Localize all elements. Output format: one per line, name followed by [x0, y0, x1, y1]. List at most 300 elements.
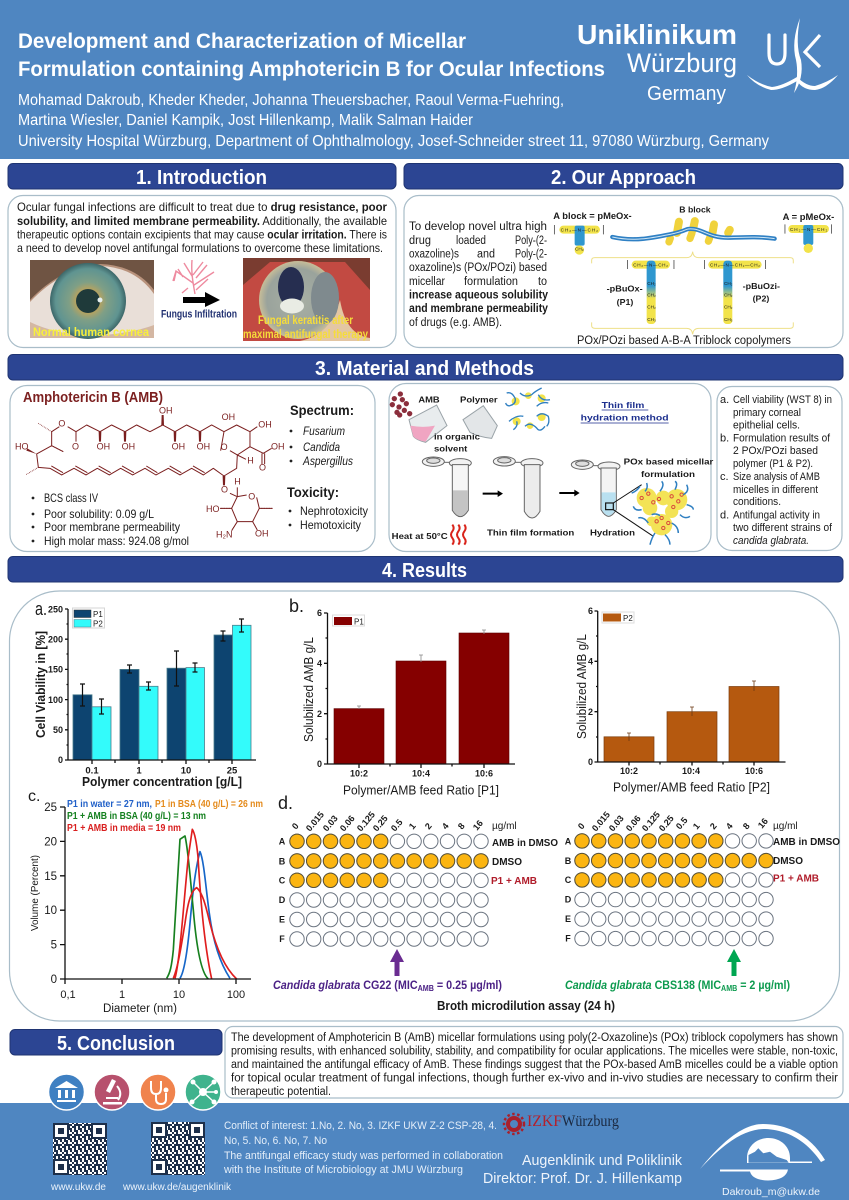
y tick labels: 0: [51, 974, 57, 986]
list: AMB properties: [32, 491, 189, 548]
x tick labels: 10: [181, 766, 191, 776]
row labels: F: [279, 934, 285, 944]
tick labels: [588, 606, 593, 767]
y tick labels: 5: [51, 940, 57, 952]
panel: study aims: a.: [720, 394, 729, 406]
row names: µg/ml: [773, 821, 798, 832]
institution name: Germany: [647, 83, 726, 105]
brackets: [592, 252, 793, 334]
list: AMB properties: BCS class IV: [44, 491, 98, 505]
approach paragraph: to: [538, 276, 547, 288]
label: AMB: AMB: [418, 394, 440, 404]
chart a: cell viability: [34, 599, 256, 789]
title: Formulation containing Amphotericin B for Ocular Infections: [18, 57, 605, 81]
authors and affiliation: [18, 92, 769, 150]
row names: P1 + AMB: [773, 874, 819, 884]
chemical structure: AMB: H: [247, 455, 254, 465]
section heading: material and methods: 3. Material and Methods: [315, 358, 534, 380]
bars: [334, 633, 509, 764]
panel: study aims: conditions.: [733, 496, 781, 508]
tick labels: 2: [317, 709, 322, 719]
curves: [167, 829, 237, 979]
icon: heat waves: [451, 525, 466, 545]
row labels: E: [279, 914, 285, 924]
photo: fungal keratitis: maximal antifungal therapy: [243, 327, 368, 341]
process labels: Heat at 50°C: [392, 531, 448, 541]
QR labels: www.ukw.de: [50, 1182, 106, 1193]
concentration labels: 0.25: [371, 813, 390, 833]
chemical structure: AMB: O: [248, 491, 255, 501]
chemical structure: AMB: O: [221, 484, 228, 494]
row names: AMB in DMSO: [492, 838, 558, 849]
authors and affiliation: University Hospital Würzburg, Department of Ophthalmology, Josef-Schneider street 11, 97080 Würzburg, Germany: [18, 133, 769, 150]
row names: AMB in DMSO: [773, 837, 840, 848]
y tick labels: 150: [48, 664, 63, 674]
chemical structure: AMB: OH: [255, 529, 268, 539]
caption: broth microdilution: Broth microdilution assay (24 h): [437, 999, 615, 1013]
concentration labels: 0.03: [607, 813, 626, 833]
intro paragraph: Ocular fungal infections are difficult to treat due to drug resistance, poor: [17, 200, 387, 214]
heading: thin film hydration: [581, 400, 669, 423]
department text: Augenklinik und Poliklinik: [522, 1153, 683, 1169]
panel: study aims: c.: [720, 471, 729, 483]
authors and affiliation: Martina Wiesler, Daniel Kampik, Jost Hillenkamp, Malik Salman Haider: [18, 112, 474, 129]
row labels: C: [279, 876, 286, 886]
label: in organic solvent: solvent: [434, 443, 467, 453]
axes: [60, 807, 251, 984]
axis title y: Volume (Percent): [29, 855, 41, 931]
icon: AMB powder: [390, 391, 412, 418]
x tick labels: 1: [119, 989, 125, 1001]
concentration labels: 16: [471, 818, 485, 832]
row labels: A: [565, 836, 572, 846]
concentration labels: 1: [407, 821, 418, 831]
panel: study aims: Size analysis of AMB: [733, 471, 820, 483]
logo: IZKF Würzburg: Würzburg: [562, 1113, 619, 1130]
concentration labels: 0.03: [321, 813, 340, 833]
panel letter a: a.: [35, 599, 47, 619]
caption: CBS138: AMB: [721, 984, 737, 993]
icon: AMB beaker: [409, 405, 447, 442]
approach paragraph: of drugs (e.g. AMB).: [409, 317, 502, 329]
monomer: pBuOx: CH₂: [647, 293, 656, 298]
monomer: left A block: [554, 225, 603, 255]
concentration labels: 8: [456, 821, 467, 831]
chemical structure: AMB: [15, 405, 284, 540]
axes: [594, 611, 786, 766]
panel: study aims: [717, 386, 842, 550]
panel letter d: d.: [278, 793, 293, 813]
panel: study aims: d.: [720, 510, 729, 522]
icon: polymer beaker: [463, 406, 497, 438]
tube 2: [493, 457, 543, 518]
concentration labels: 0.015: [304, 810, 326, 833]
y tick labels: 100: [48, 695, 63, 705]
label: B block: B block: [679, 204, 711, 214]
intro paragraph: solubility, and limited membrane permeability. Additionally, the available: [17, 214, 387, 228]
conflict of interest note: [223, 1120, 503, 1176]
y tick labels: 0: [58, 755, 63, 765]
monomer: pBuOx: [628, 260, 674, 324]
icon: institution: [48, 1074, 84, 1110]
labels: P1 and P2: -pBuOzi-: [743, 281, 780, 291]
tick labels: 6: [588, 606, 593, 616]
panel: study aims: primary corneal: [733, 407, 801, 419]
caption: triblock copolymers: POx/POzi based A-B-A Triblock copolymers: [577, 333, 791, 347]
panel: study aims: polymer (P1 & P2).: [733, 458, 813, 470]
chart b: P1 solubilized AMB: 10:4: [412, 768, 430, 778]
icon: microscope: [94, 1074, 130, 1110]
row labels: [565, 836, 572, 944]
legend text: [67, 799, 263, 834]
caption: CG22: Candida glabrata CG22 (MIC: [273, 978, 424, 992]
list: toxicity: Hemotoxicity: [300, 518, 361, 532]
y tick labels: 10: [44, 905, 57, 917]
concentration labels: 1: [691, 821, 702, 831]
x tick labels: [85, 766, 238, 776]
row labels: D: [279, 895, 286, 905]
x tick labels: 100: [227, 989, 245, 1001]
tick labels: 4: [317, 658, 322, 668]
monomer: right A block: [785, 224, 832, 253]
concentration labels: 0.06: [624, 813, 643, 833]
photo: fungal keratitis: [243, 258, 370, 341]
arrow: infiltration: [183, 292, 220, 307]
row labels: [279, 836, 286, 944]
label: in organic solvent: [434, 432, 480, 453]
y tick labels: [44, 802, 57, 986]
logo: eye clinic: [700, 1124, 825, 1180]
panel: study aims: Antifungal activity in: [733, 510, 820, 522]
conflict of interest note: with the Institute of Microbiology at JMU Würzburg: [223, 1164, 463, 1176]
legend: [602, 612, 634, 623]
bars: [73, 625, 251, 760]
chemical structure: AMB: HO: [206, 504, 219, 514]
approach paragraph: drug: [409, 235, 431, 247]
x tick labels: 1: [136, 766, 142, 776]
approach paragraph: Poly-(2-: [515, 248, 547, 260]
error bars: [357, 630, 486, 709]
panel: thin film hydration method: [389, 384, 714, 552]
list: spectrum: Fusarium: [303, 424, 345, 438]
label: polymer: Polymer: [460, 394, 498, 404]
arrow: step 1: [483, 490, 503, 497]
panel: study aims: epithelial cells.: [733, 420, 800, 432]
list: spectrum: Candida: [303, 440, 340, 454]
chemical structure: AMB: OH: [222, 412, 235, 422]
panel: study aims: Cell viability (WST 8) in: [733, 394, 832, 406]
row labels: B: [279, 856, 286, 866]
tube 1: [422, 457, 471, 517]
panel: study aims: micelles in different: [733, 484, 818, 496]
department text: Direktor: Prof. Dr. J. Hillenkamp: [483, 1171, 682, 1187]
caption: CBS138: Candida glabrata CBS138 (MIC: [565, 978, 730, 992]
monomer: pBuOzi: CH₂—N—CH₂—CH₂: [710, 262, 760, 267]
section heading: our approach: 2. Our Approach: [551, 167, 696, 189]
section heading: material and methods: [8, 354, 843, 380]
monomer: pBuOzi: CH₂: [724, 293, 733, 298]
x tick labels: [60, 989, 245, 1001]
diagram: A-B-A triblock copolymer: [553, 204, 834, 347]
title: Development and Characterization of Micellar: [18, 29, 467, 53]
logo: IZKF Würzburg: IZKF: [527, 1113, 562, 1130]
axis title x: Polymer/AMB feed Ratio [P1]: [343, 782, 499, 798]
conflict of interest note: No, 5. No, 6. No, 7. No: [224, 1135, 327, 1147]
approach paragraph: formulation: [464, 276, 518, 288]
monomer: pBuOx: CH₂—N—CH₂: [633, 262, 668, 267]
row names: [773, 821, 840, 884]
legend: P2: [623, 614, 633, 623]
legend: P1: [354, 618, 364, 626]
tick labels: [317, 608, 322, 769]
monomer: pBuOx: CH₂: [647, 281, 656, 286]
concentration labels: 0.06: [338, 813, 357, 833]
panel: results: [10, 591, 840, 1021]
photo: fungal keratitis: Fungal keratitis after: [258, 313, 353, 327]
axes: [324, 613, 515, 768]
institution name: Würzburg: [627, 48, 737, 78]
section heading: results: 4. Results: [382, 560, 467, 582]
intro paragraph: a need to develop novel antifungal formulations to overcome these limitations.: [17, 241, 383, 255]
caption: CG22: AMB: [418, 984, 434, 993]
chart b: P2 solubilized AMB: 10:6: [745, 766, 763, 776]
labels: P1 and P2: (P2): [753, 294, 769, 304]
panel: amphotericin B: [10, 386, 375, 552]
panel letter c: c.: [28, 788, 40, 805]
tube 3: [571, 460, 620, 516]
legend text: P1 + AMB in media = 19 nm: [67, 823, 181, 834]
intro paragraph: [17, 200, 387, 255]
process labels: [392, 457, 714, 541]
panel: introduction: [8, 196, 396, 348]
legend text: P1 + AMB in BSA (40 g/L) = 13 nm: [67, 811, 206, 822]
approach paragraph: micellar: [409, 276, 445, 288]
QR labels: [50, 1182, 232, 1193]
row names: [491, 821, 558, 887]
process labels: formulation: [641, 469, 695, 479]
panel: conclusion: for topical ocular treatment of fungal infections, though further ex-vivo and in-vivo studies are necessary to confirm their: [231, 1072, 838, 1084]
panel: study aims: b.: [720, 432, 729, 444]
concentration labels: [576, 810, 770, 833]
title: [18, 29, 605, 81]
row labels: F: [565, 934, 571, 944]
row labels: C: [565, 875, 572, 885]
legend: [332, 615, 364, 626]
error bars: [627, 681, 756, 741]
arrow: MIC CG22: [390, 949, 404, 976]
section heading: conclusion: [10, 1030, 222, 1055]
B block chain: [612, 216, 775, 247]
intro paragraph: therapeutic options contain excipients that may cause ocular irritation. There is: [17, 228, 387, 242]
concentration labels: 0: [290, 821, 301, 831]
list: AMB properties: Poor solubility: 0.09 g/L: [44, 507, 154, 521]
y tick labels: 25: [44, 802, 57, 814]
arrow: MIC CBS138: [727, 949, 741, 976]
logo: IZKF Würzburg: [504, 1113, 619, 1134]
list: toxicity: Nephrotoxicity: [300, 504, 368, 518]
plate d: CG22: [273, 793, 558, 993]
QR code 1: [53, 1123, 107, 1175]
chart b: P1 solubilized AMB: 10:2: [350, 768, 368, 778]
section heading: introduction: [8, 164, 396, 189]
tick labels: 6: [317, 608, 322, 618]
panel: conclusion: therapeutic potential.: [231, 1086, 331, 1098]
row names: DMSO: [773, 856, 803, 867]
x tick labels: 25: [227, 766, 238, 776]
chemical structure: AMB: HO: [15, 441, 28, 451]
panel: study aims: Formulation results of: [733, 432, 831, 444]
icon: UK logo: [747, 18, 838, 93]
chart b: P2 solubilized AMB: 10:2: [620, 766, 638, 776]
y tick labels: 50: [53, 725, 63, 735]
chemical structure: AMB: OH: [258, 420, 272, 430]
concentration labels: 0.125: [640, 810, 662, 833]
error bars: [80, 619, 244, 714]
panel letter b: b.: [289, 596, 304, 616]
row names: µg/ml: [492, 821, 517, 832]
monomer: pBuOx: CH₂: [647, 304, 656, 309]
x tick labels: 10: [173, 989, 185, 1001]
caption: CBS138: = 2 µg/ml): [737, 978, 790, 992]
approach paragraph: [409, 221, 549, 329]
approach paragraph: oxazoline)s (POx/POzi) based: [409, 262, 547, 274]
concentration labels: 2: [423, 821, 434, 831]
icon: network: [185, 1074, 221, 1110]
caption: CG22: = 0.25 µg/ml): [434, 978, 502, 992]
chemical structure: AMB: OH: [197, 441, 210, 451]
QR code 2: [151, 1122, 205, 1175]
axes: [65, 609, 256, 764]
concentration labels: 0.5: [674, 815, 690, 831]
chart b: P1 solubilized AMB: [289, 596, 515, 798]
chart b: P2 solubilized AMB: 10:4: [682, 766, 700, 776]
axis title x: Polymer/AMB feed Ratio [P2]: [613, 780, 770, 794]
QR labels: www.ukw.de/augenklinik: [122, 1182, 232, 1193]
monomer: pBuOzi: CH₃: [724, 317, 733, 322]
panel: conclusion: [225, 1026, 843, 1098]
label: fungus infiltration: Fungus Infiltration: [161, 308, 237, 320]
monomer: left A block: CH₃: [575, 247, 584, 252]
row names: DMSO: [492, 857, 522, 868]
chart b: P1 solubilized AMB: 10:6: [475, 768, 493, 778]
monomer: pBuOzi: CH₂: [724, 281, 733, 286]
heading: thin film hydration: hydration method: [581, 413, 669, 423]
list: AMB properties: High molar mass: 924.08 g/mol: [44, 534, 189, 548]
axis title y: Cell Viability in [%]: [34, 631, 48, 738]
section heading: our approach: [404, 164, 843, 189]
list: spectrum: Spectrum:: [290, 402, 354, 418]
chemical structure: AMB: O: [259, 463, 266, 473]
chemical structure: AMB: O: [58, 419, 65, 429]
wells: [575, 834, 773, 946]
y tick labels: 200: [48, 634, 63, 644]
process labels: Hydration: [590, 528, 635, 538]
icon: fungus hyphae: [173, 260, 214, 294]
section heading: results: [8, 556, 843, 582]
y tick labels: 250: [48, 604, 63, 614]
icon: polymer chains: [506, 388, 550, 430]
tick labels: 2: [588, 707, 593, 717]
row labels: E: [565, 914, 571, 924]
approach paragraph: and membrane permeability: [409, 303, 549, 315]
approach paragraph: loaded: [456, 235, 486, 247]
section heading: conclusion: 5. Conclusion: [57, 1033, 175, 1055]
panel: our approach: [404, 196, 843, 348]
heading: amphotericin B: Amphotericin B (AMB): [23, 390, 163, 406]
legend: [72, 608, 104, 628]
chart b: P2 solubilized AMB: [574, 606, 786, 794]
legend: P1: [93, 610, 103, 619]
micelle zoom: [613, 481, 693, 545]
concentration labels: 0.015: [590, 810, 612, 833]
label: A block: A block = pMeOx-: [553, 211, 632, 221]
section heading: introduction: 1. Introduction: [136, 167, 267, 189]
conflict of interest note: Conflict of interest: 1.No, 2. No, 3. IZKF UKW Z-2 CSP-28, 4.: [224, 1120, 497, 1132]
panel: study aims: 2 POx/POzi based: [733, 445, 818, 457]
chemical structure: AMB: OH: [271, 441, 284, 451]
concentration labels: 0.25: [657, 813, 676, 833]
authors and affiliation: Mohamad Dakroub, Kheder Kheder, Johanna Theuersbacher, Raoul Verma-Fuehring,: [18, 92, 564, 109]
concentration labels: 2: [708, 821, 719, 831]
legend text: P1 in BSA (40 g/L) = 26 nm: [155, 799, 263, 810]
x tick labels: 0,1: [60, 989, 76, 1001]
monomer: pBuOzi: CH₂: [724, 304, 733, 309]
label: A: A = pMeOx-: [783, 212, 834, 222]
chemical structure: AMB: O: [72, 441, 79, 451]
approach paragraph: oxazoline)s: [409, 248, 459, 260]
chemical structure: AMB: H₂N: [216, 530, 232, 540]
y tick labels: 15: [44, 871, 57, 883]
concentration labels: 16: [756, 816, 770, 830]
concentration labels: 0.125: [355, 810, 377, 833]
approach paragraph: Poly-(2-: [515, 235, 547, 247]
institution name: Uniklinikum: [577, 19, 737, 50]
list: spectrum: [290, 402, 354, 468]
concentration labels: [290, 810, 485, 833]
axis title y: Solubilized AMB g/L: [301, 637, 316, 742]
chemical structure: AMB: OH: [122, 441, 135, 451]
list: spectrum: Aspergillus: [302, 454, 353, 468]
approach paragraph: increase aqueous solubility: [409, 290, 549, 302]
labels: P1 and P2: (P1): [617, 297, 633, 307]
bars: [604, 686, 779, 762]
y tick labels: [48, 604, 63, 765]
monomer: left A block: CH₂—N—CH₂: [561, 228, 598, 233]
arrow: step 2: [559, 490, 580, 496]
labels: P1 and P2: -pBuOx-: [607, 284, 643, 294]
icon: stethoscope: [140, 1074, 176, 1110]
footer banner: [0, 1103, 849, 1200]
approach paragraph: and: [477, 248, 495, 260]
label: in organic solvent: in organic: [434, 432, 480, 442]
chemical structure: AMB: OH: [97, 441, 110, 451]
chemical structure: AMB: OH: [172, 441, 185, 451]
concentration labels: 0: [576, 821, 587, 831]
list: toxicity: [287, 484, 368, 532]
approach paragraph: To develop novel ultra high: [409, 221, 547, 233]
photo: normal human cornea: Normal human cornea: [33, 325, 149, 339]
panel: study aims: candida glabrata.: [733, 535, 809, 547]
labels: P1 and P2: [607, 281, 780, 307]
list: AMB properties: Poor membrane permeability: [44, 520, 180, 534]
x tick labels: 0.1: [85, 766, 99, 776]
chemical structure: AMB: H: [234, 477, 241, 487]
row labels: A: [279, 836, 286, 846]
monomer: right A block: CH₂—N—CH₂: [790, 227, 827, 232]
process labels: POx based micellar: [624, 457, 714, 467]
list: toxicity: Toxicity:: [287, 484, 339, 500]
panel: study aims: two different strains of: [733, 522, 833, 534]
